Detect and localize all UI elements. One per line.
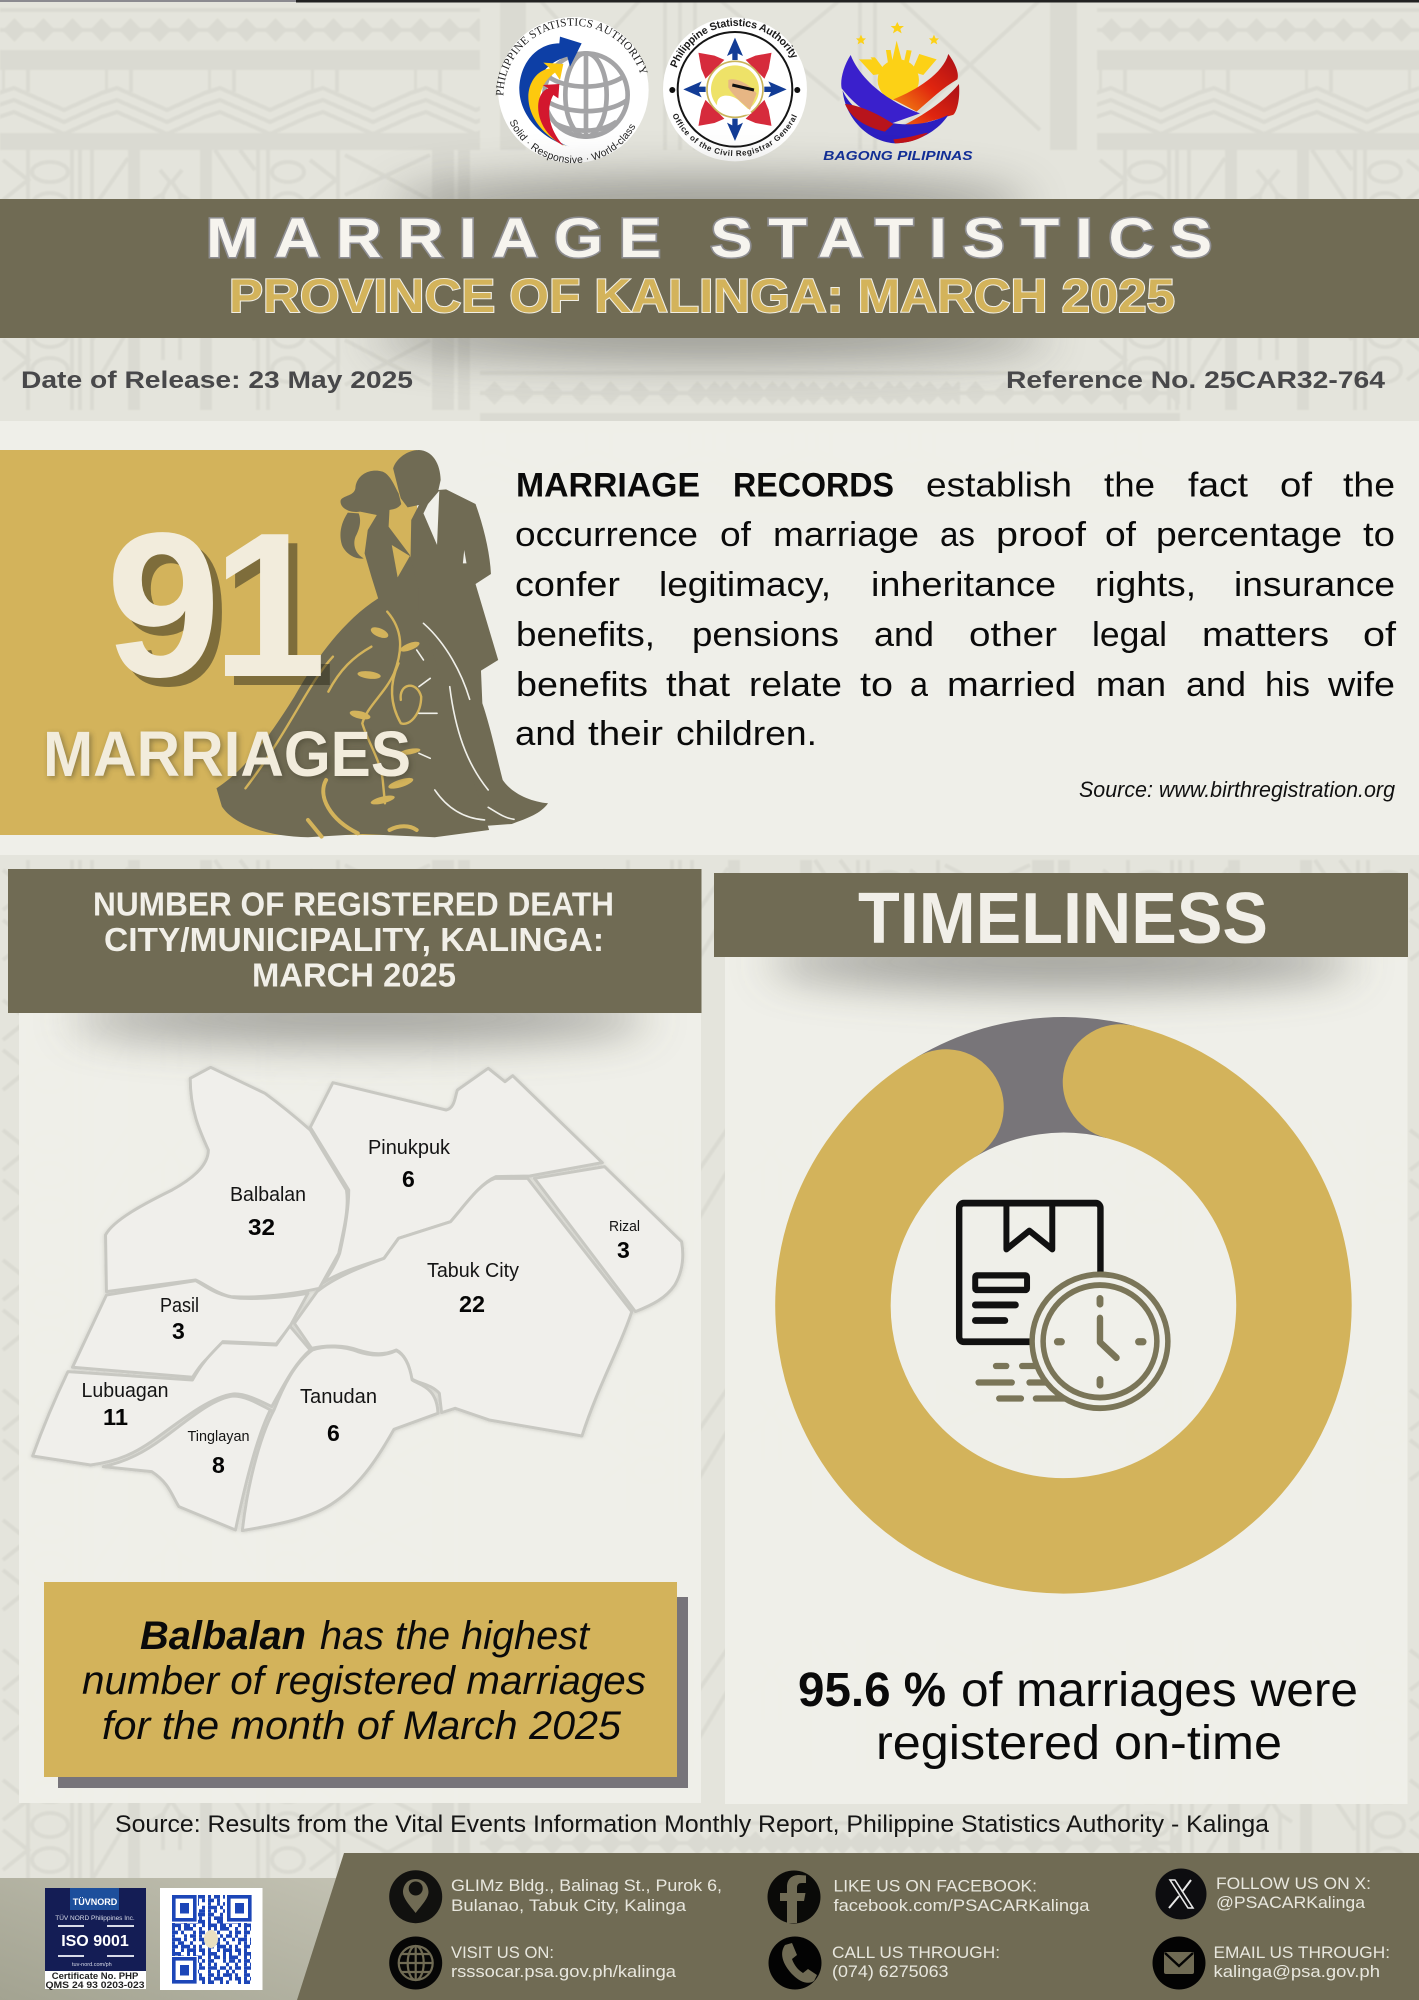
region: Tanudan — [242, 1347, 438, 1531]
text block: marriage records definition: benefits, — [516, 616, 655, 654]
main title: MARRIAGE STATISTICS — [206, 206, 1228, 269]
text block: marriage records definition: the — [1343, 466, 1395, 504]
text block: marriage records definition: children. — [676, 715, 817, 753]
X text: @PSACARKalinga — [1216, 1893, 1366, 1912]
data source line: Source: Results from the Vital Events Information Monthly Report, Philippine Statistics Authority - Kalinga — [115, 1811, 1270, 1838]
text block: marriage records definition: married — [947, 666, 1076, 704]
region: Tabuk City — [294, 1178, 632, 1436]
map labels: 6 — [327, 1420, 340, 1446]
email text: EMAIL US THROUGH: — [1214, 1943, 1390, 1962]
phone text: CALL US THROUGH: — [832, 1943, 1000, 1962]
text block: marriage records definition: percentage — [1156, 516, 1342, 554]
ISO 9001 certification badge: ISO 9001 — [61, 1933, 129, 1950]
text block: marriage records definition: to — [1363, 516, 1395, 554]
logo: Philippine Statistics Authority — [496, 17, 649, 164]
text block: marriage records definition: establish — [926, 466, 1072, 504]
map heading: CITY/MUNICIPALITY, KALINGA: — [104, 921, 604, 958]
footer left strip — [0, 1878, 340, 2000]
subtitle: PROVINCE OF KALINGA: MARCH 2025 — [229, 269, 1175, 322]
logo: Philippine Statistics Authority: PHILIPPINE STATISTICS AUTHORITY — [496, 18, 648, 96]
text block: marriage records definition: occurrence — [515, 516, 698, 554]
map labels: Pinukpuk — [368, 1137, 451, 1159]
timeliness statement — [798, 1664, 1358, 1770]
ISO 9001 certification badge: TÜVNORD — [73, 1897, 118, 1907]
map labels: Tanudan — [300, 1386, 377, 1408]
ISO 9001 certification badge: tuv-nord.com/ph — [72, 1962, 112, 1968]
text block: marriage records definition: of — [1105, 516, 1137, 554]
ISO 9001 certification badge: TÜV NORD Philippines Inc. — [55, 1914, 135, 1922]
phone text: (074) 6275063 — [832, 1962, 948, 1981]
timeliness statement: registered on-time — [876, 1717, 1282, 1770]
timeliness heading: TIMELINESS — [858, 879, 1268, 959]
text block: marriage records definition: as — [940, 516, 975, 554]
text block: marriage records definition: insurance — [1234, 566, 1395, 604]
text block: marriage records definition: of — [1280, 466, 1313, 504]
text block: marriage records definition: legitimacy, — [659, 566, 831, 604]
callout: highest municipality: Balbalan — [140, 1614, 306, 1658]
text block: marriage records definition: wife — [1327, 666, 1395, 704]
website text — [451, 1943, 677, 1981]
region: Balbalan — [106, 1067, 347, 1297]
map heading: MARCH 2025 — [252, 956, 456, 994]
text block: marriage records definition: of — [720, 516, 752, 554]
map labels: Pasil — [160, 1295, 199, 1317]
icon: facebook — [768, 1870, 820, 1924]
icon: X logo — [1156, 1868, 1206, 1920]
callout: highest municipality: number of registered marriages — [82, 1659, 646, 1703]
text block: marriage records definition: a — [910, 666, 928, 704]
icon: telephone — [768, 1936, 822, 1990]
logo: Bagong Pilipinas: BAGONG PILIPINAS — [823, 148, 973, 163]
address text: GLIMz Bldg., Balinag St., Purok 6, — [451, 1876, 722, 1895]
text block: marriage records definition: marriage — [773, 516, 919, 554]
shadow below title band — [370, 314, 1050, 358]
icon: document box with clock — [959, 1203, 1168, 1408]
text block: marriage records definition: and — [515, 715, 576, 753]
text block: marriage records definition: other — [969, 616, 1057, 654]
map labels: 11 — [103, 1404, 128, 1430]
logo: Office of the Civil Registrar General — [663, 18, 807, 162]
shadow above title band — [390, 179, 1030, 231]
text block: marriage records definition: inheritance — [871, 566, 1056, 604]
website text: rsssocar.psa.gov.ph/kalinga — [451, 1962, 677, 1981]
map labels: 3 — [617, 1237, 630, 1263]
timeliness statement: of marriages were — [961, 1664, 1358, 1717]
text block: marriage records definition: and — [1186, 666, 1246, 704]
text block: marriage records definition: confer — [515, 566, 620, 604]
ISO 9001 certification badge: Certificate No. PHP — [52, 1971, 139, 1982]
donut chart — [833, 1075, 1294, 1536]
callout: highest municipality: for the month of March 2025 — [102, 1704, 622, 1748]
text block: marriage records definition: RECORDS — [733, 466, 894, 504]
title band — [0, 199, 1419, 338]
light panel: summary — [0, 421, 1419, 855]
text block: marriage records definition: his — [1265, 666, 1310, 704]
text block: marriage records definition: pensions — [692, 616, 839, 654]
label MARRIAGES: MARRIAGES — [43, 718, 411, 790]
big number 91: 91 — [106, 490, 327, 720]
text block: marriage records definition: MARRIAGE — [516, 466, 700, 504]
map heading — [8, 869, 702, 1013]
text block: marriage records definition: and — [874, 616, 934, 654]
text block: marriage records definition — [515, 466, 1397, 753]
facebook text: facebook.com/PSACARKalinga — [834, 1896, 1090, 1915]
text block: marriage records definition: that — [666, 666, 731, 704]
website text: VISIT US ON: — [451, 1943, 554, 1962]
address text — [451, 1876, 722, 1915]
region: Tinglayan — [103, 1396, 272, 1530]
text block: marriage records definition: matters — [1202, 616, 1329, 654]
gold total box — [0, 450, 417, 835]
date of release: Date of Release: 23 May 2025 — [21, 367, 413, 394]
phone text — [832, 1943, 1000, 1981]
bride and groom silhouette — [216, 450, 548, 837]
region: Rizal — [534, 1167, 683, 1312]
source note: Source: www.birthregistration.org — [1079, 777, 1396, 802]
text block: marriage records definition: benefits — [516, 666, 648, 704]
text block: marriage records definition: proof — [996, 516, 1087, 554]
email text — [1214, 1943, 1390, 1981]
icon: location pin — [389, 1870, 442, 1923]
text block: marriage records definition: the — [1104, 466, 1155, 504]
X text: FOLLOW US ON X: — [1216, 1874, 1371, 1893]
map labels: Balbalan — [230, 1184, 306, 1206]
map labels: Lubuagan — [82, 1380, 168, 1402]
facebook text: LIKE US ON FACEBOOK: — [834, 1876, 1037, 1896]
text block: marriage records definition: to — [860, 666, 893, 704]
text block: marriage records definition: relate — [749, 666, 842, 704]
map labels: Tabuk City — [427, 1260, 519, 1282]
ISO 9001 certification badge — [45, 1888, 146, 1991]
logo: Philippine Statistics Authority: Solid · Responsive · World-class — [510, 120, 635, 164]
panel: registered marriages map — [8, 869, 702, 1803]
region: Lubuagan — [33, 1326, 310, 1465]
text block: marriage records definition: their — [588, 715, 663, 753]
logo: Bagong Pilipinas — [823, 22, 973, 163]
map labels: 3 — [172, 1318, 185, 1344]
reference number: Reference No. 25CAR32-764 — [1006, 367, 1386, 394]
X text — [1216, 1874, 1371, 1912]
text block: marriage records definition: fact — [1188, 466, 1249, 504]
logo: Office of the Civil Registrar General: Office of the Civil Registrar General — [673, 114, 797, 156]
map heading: NUMBER OF REGISTERED DEATH — [93, 886, 614, 922]
callout: highest municipality: has the highest — [320, 1614, 591, 1658]
map labels: 6 — [402, 1166, 415, 1192]
timeliness statement: 95.6 % — [798, 1664, 946, 1717]
map labels: 22 — [459, 1291, 485, 1317]
callout: highest municipality — [44, 1582, 688, 1788]
text block: marriage records definition: man — [1096, 666, 1166, 704]
footer band — [297, 1853, 1419, 2000]
facebook text — [834, 1876, 1090, 1915]
icon: globe — [389, 1936, 442, 1990]
panel: timeliness — [714, 873, 1408, 1804]
logo: Office of the Civil Registrar General: Philippine Statistics Authority — [670, 18, 798, 68]
text block: marriage records definition: legal — [1092, 616, 1167, 654]
map labels: 8 — [212, 1452, 225, 1478]
label MARRIAGES: MARRIAGES — [45, 720, 413, 792]
choropleth map of Kalinga — [33, 1067, 683, 1531]
text block: marriage records definition: of — [1363, 616, 1397, 654]
map labels: Rizal — [609, 1218, 640, 1235]
big number 91: 91 — [115, 499, 336, 729]
email text: kalinga@psa.gov.ph — [1214, 1962, 1380, 1981]
icon: envelope — [1152, 1936, 1206, 1990]
QR code — [160, 1888, 262, 1990]
region: Pinukpuk — [310, 1068, 602, 1283]
address text: Bulanao, Tabuk City, Kalinga — [451, 1896, 687, 1915]
map labels — [82, 1137, 640, 1478]
map labels: 32 — [248, 1214, 275, 1240]
ISO 9001 certification badge: QMS 24 93 0203-023 — [46, 1980, 144, 1991]
timeliness heading — [714, 873, 1408, 959]
map labels: Tinglayan — [188, 1428, 250, 1445]
text block: marriage records definition: rights, — [1095, 566, 1196, 604]
region: Pasil — [72, 1281, 308, 1377]
